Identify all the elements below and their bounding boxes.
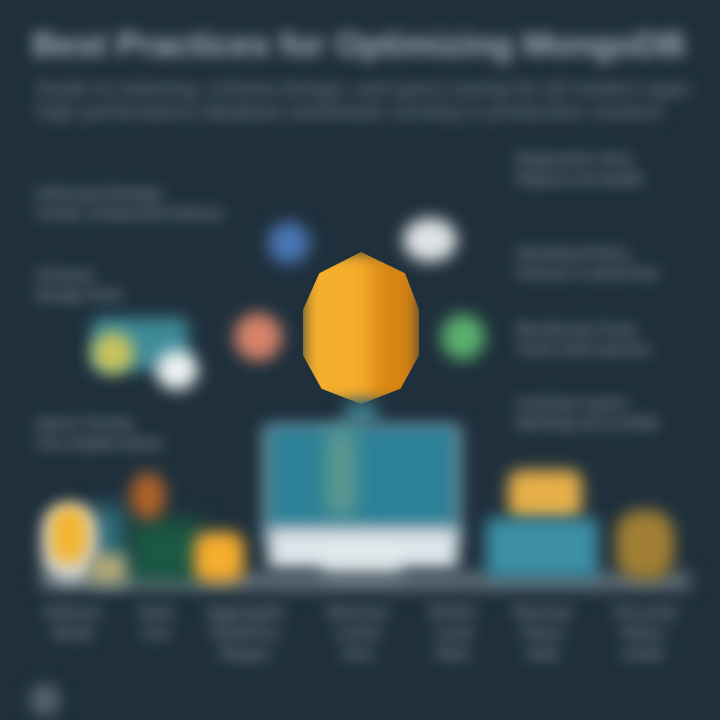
label 3: Pipelines (210, 625, 280, 642)
yellow drum (194, 532, 244, 582)
text block: right two (514, 242, 660, 284)
text block: left middle (32, 265, 124, 308)
text block: left top: Indexing Strategy (36, 185, 162, 202)
subtitle: high performance database workloads running in production clusters (36, 102, 664, 123)
yellow box (508, 470, 582, 520)
label 4 (324, 601, 390, 665)
monitor screen (270, 428, 454, 526)
label 7 (612, 602, 680, 665)
icon: blue circle (268, 222, 310, 264)
icon: central gold hexagon (303, 252, 419, 404)
shelf (40, 572, 690, 590)
label 7: Audit (623, 646, 663, 663)
text block: right one: Replication Sets (516, 151, 633, 168)
illustration: right group (475, 457, 686, 590)
label 2 (136, 602, 176, 644)
icon: red circle (234, 313, 282, 361)
label 5: Load (434, 625, 472, 642)
text block: left middle: Design Rule (36, 287, 123, 304)
monitor frame (262, 424, 462, 542)
label 1: Indexes (43, 604, 103, 621)
monitor base (268, 528, 458, 570)
label 1: Build (53, 625, 93, 642)
card body (92, 318, 188, 370)
label 4: Size (342, 646, 374, 663)
teal stand (486, 518, 598, 578)
label 2: Use (141, 625, 171, 642)
yellow pill (50, 506, 88, 564)
illustration: monitor (252, 412, 473, 588)
label 3 (204, 602, 286, 667)
label 4: Limits (334, 625, 382, 642)
labels: bottom row (40, 601, 680, 667)
title: Best Practices for Optimizing MongoDB (32, 26, 686, 64)
label 4: Memory (327, 604, 389, 621)
subtitle (34, 78, 691, 125)
text block: left lower (33, 413, 164, 455)
label 3: Aggregate (205, 604, 285, 621)
label 3: Stages (219, 646, 271, 663)
text block: right one (512, 148, 646, 191)
white pill (42, 504, 98, 582)
icon: green circle (441, 314, 485, 360)
text block: left top (33, 183, 225, 225)
gold drum (616, 510, 674, 580)
icon: white cloud (403, 218, 457, 262)
text block: right three: Monitoring Tools (516, 321, 637, 338)
screen highlight (328, 430, 354, 516)
label 5: Rate (436, 646, 470, 663)
stem below hexagon (345, 402, 377, 428)
text block: left lower: Use explain plans (36, 435, 163, 452)
text block: left top: Create compound indexes (36, 205, 224, 222)
green panel (132, 520, 202, 580)
label 7: Security (614, 604, 677, 621)
yellow dot (92, 332, 134, 374)
text block: right four (513, 393, 661, 436)
icon: bottom left badge (30, 684, 60, 716)
white dot (156, 350, 198, 390)
label 6: Plans (522, 625, 564, 642)
label 5 (426, 601, 478, 665)
brown circle (130, 472, 166, 520)
label 1 (40, 602, 104, 644)
text block: left middle: Schema (36, 267, 94, 284)
label 6 (510, 602, 574, 665)
teal panel (90, 506, 126, 580)
text block: right three: Track slow queries (516, 341, 650, 358)
tan block (90, 554, 126, 584)
subtitle: Guide to indexing, schema design, and query tuning for all modern apps (36, 79, 691, 100)
text block: left lower: Query Tuning (36, 415, 132, 432)
label 2: Data (139, 604, 173, 621)
label 6: Safe (526, 646, 560, 663)
text block: right four: Caching Layers (516, 395, 628, 412)
text block: right one: Replica set health (516, 171, 644, 188)
illustration: left card (80, 308, 210, 402)
label 7: Rules (621, 625, 665, 642)
text block: right four: Working set in RAM (516, 415, 657, 432)
label 5: Writes (429, 604, 477, 621)
monitor foot (322, 550, 402, 578)
label 6: Backup (514, 604, 572, 621)
text block: right two: Choose a shard key (516, 265, 658, 282)
text block: right three (512, 318, 652, 361)
illustration: left group (30, 462, 257, 596)
text block: right two: Sharding Policy (516, 245, 629, 262)
